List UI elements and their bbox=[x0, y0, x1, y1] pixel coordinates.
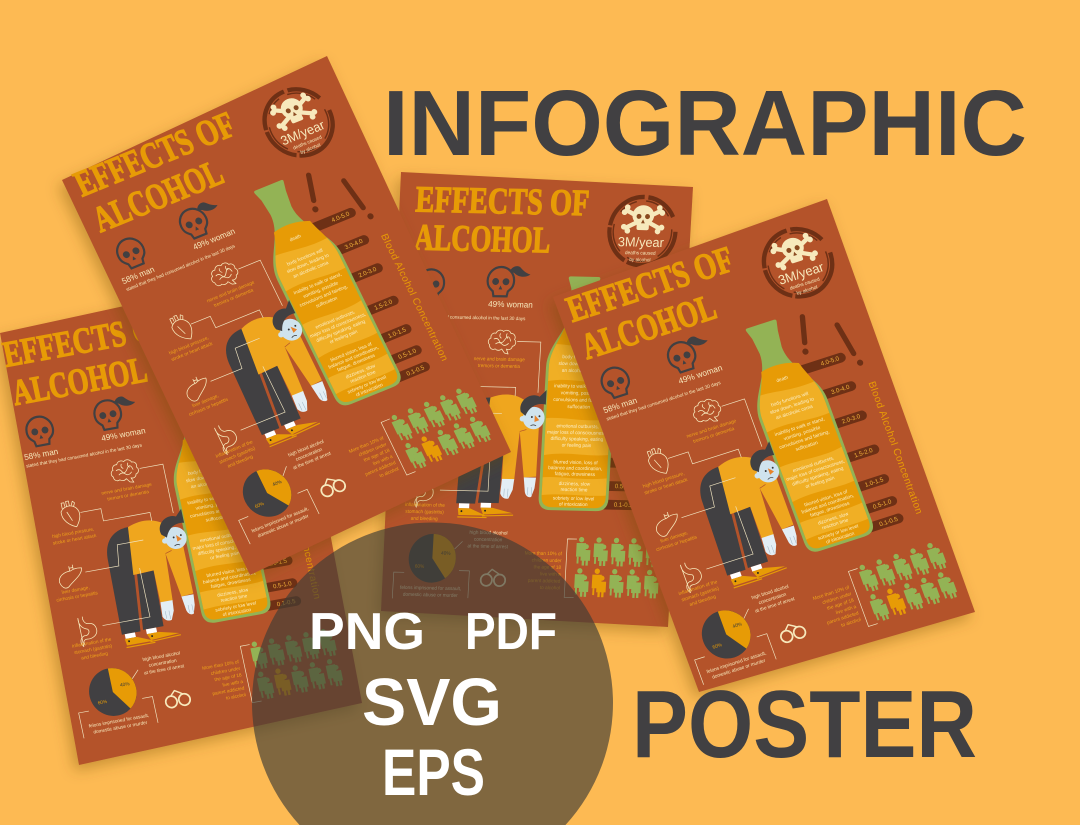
organ effects text: nerve and brain damage bbox=[101, 482, 153, 497]
format: PDF: PDF bbox=[465, 603, 557, 661]
bottle chart: 0.1-0.5 bbox=[614, 502, 633, 509]
poster title bbox=[0, 305, 182, 413]
translucent format circle bbox=[252, 522, 613, 825]
bottle chart: or feeling pain bbox=[210, 550, 240, 561]
bottle chart: reaction time bbox=[349, 369, 377, 385]
pie chart: 60% bbox=[415, 564, 425, 570]
bottle chart: difficulty speaking, eating bbox=[550, 436, 604, 443]
pie chart bbox=[695, 604, 757, 665]
organ effects text: inflammation of the bbox=[678, 579, 719, 597]
badge: 3M/year bbox=[776, 259, 826, 288]
organ effects text: nerve and brain damage bbox=[474, 356, 525, 363]
organ effects text: stroke or heart attack bbox=[644, 477, 689, 496]
bottle chart: 1.5-2.0 bbox=[373, 298, 394, 312]
bottle chart: blurred vision, loss of bbox=[553, 459, 599, 466]
bottle chart: vomiting, possible bbox=[195, 499, 234, 512]
bottle chart: 3.0-4.0 bbox=[247, 463, 268, 473]
bottle chart: 3.0-4.0 bbox=[344, 238, 365, 251]
pie chart: 60% bbox=[97, 699, 109, 706]
pie chart bbox=[407, 533, 457, 583]
bottle chart: slow down, leading to bbox=[185, 470, 231, 484]
pie chart bbox=[85, 664, 141, 720]
organ effects text: stroke or heart attack bbox=[52, 533, 98, 547]
children text: children under bbox=[210, 666, 241, 677]
children text: children under bbox=[531, 557, 562, 564]
skull statistics bbox=[589, 331, 728, 423]
organ effects text: tremors or dementia bbox=[213, 287, 255, 309]
arrest text: domestic abuse or murder bbox=[257, 513, 310, 539]
poster content bbox=[392, 178, 681, 604]
bottle chart: 0.1-0.5 bbox=[276, 598, 297, 608]
organ effects text: high blood pressure, bbox=[52, 526, 95, 540]
bottle chart: 3.0-4.0 bbox=[622, 361, 641, 369]
bottle chart: 1.5-2.0 bbox=[618, 429, 637, 436]
bottle chart: inability to walk or stand, bbox=[774, 416, 826, 438]
organ effects text: inflammation of the bbox=[405, 502, 445, 509]
bottle chart: an alcoholic coma bbox=[292, 260, 330, 280]
arrest text: felons imprisoned for assault, bbox=[400, 585, 461, 592]
bottle chart: blurred vision, loss of bbox=[803, 489, 849, 508]
bottle chart: balance and coordination, bbox=[328, 345, 380, 371]
bottle chart: 1.0-1.5 bbox=[616, 460, 636, 467]
bottle chart: death bbox=[577, 333, 589, 339]
organ effects text: liver damage, bbox=[61, 585, 90, 596]
arrest text: high blood alcohol bbox=[469, 530, 508, 537]
poster title: EFFECTS OF bbox=[415, 178, 590, 223]
bottle chart bbox=[149, 378, 317, 626]
organ effects text: high blood pressure, bbox=[642, 471, 685, 490]
organ effects text: and bleeding bbox=[81, 651, 109, 662]
bottle chart: reaction time bbox=[560, 487, 588, 494]
skull statistics bbox=[103, 196, 242, 292]
bottle chart: 4.0-5.0 bbox=[330, 210, 351, 224]
children text: live with a bbox=[372, 454, 394, 467]
bottle chart: major loss of consciousness, bbox=[192, 535, 253, 552]
poster: front right bbox=[553, 199, 975, 692]
bottle chart: slow down, leading to bbox=[286, 252, 330, 275]
bottle chart: 2.0-3.0 bbox=[254, 493, 274, 503]
bottle chart: 3.0-4.0 bbox=[830, 384, 851, 396]
bottle chart: convulsions and fainting, bbox=[778, 429, 831, 451]
bottle chart: 4.0-5.0 bbox=[241, 433, 262, 444]
children icons bbox=[574, 537, 661, 598]
person with callouts bbox=[611, 374, 879, 685]
children text: to alcohol bbox=[840, 617, 862, 629]
bottle chart: major loss of consciousness, bbox=[309, 312, 367, 340]
bottle chart: death bbox=[776, 375, 789, 384]
arrest text: high blood alcohol bbox=[287, 439, 325, 459]
bottle chart: difficulty speaking, eating bbox=[315, 319, 367, 344]
vertical axis label: Blood Alcohol Concentration bbox=[648, 367, 667, 508]
badge bbox=[253, 79, 344, 166]
badge bbox=[608, 196, 677, 266]
bottle chart: 0.1-0.5 bbox=[878, 516, 900, 528]
bottle chart: body functions will bbox=[187, 464, 226, 477]
bottle chart bbox=[231, 155, 446, 411]
pie chart: 40% bbox=[732, 621, 744, 630]
children text: live with a bbox=[222, 679, 244, 689]
bottle chart: of intoxication bbox=[355, 382, 385, 398]
bottle chart: convulsions and fainting, bbox=[553, 397, 605, 404]
bottle chart: 1.5-2.0 bbox=[853, 447, 874, 460]
organ effects text: inflammation of the bbox=[72, 637, 112, 650]
organ effects text: cirrhosis or hepatitis bbox=[188, 397, 230, 418]
bottle chart: vomiting, possible bbox=[783, 425, 822, 442]
bottle chart: slow down, leading to bbox=[558, 361, 604, 368]
arrest text bbox=[399, 528, 510, 600]
arrest text: high blood alcohol bbox=[142, 650, 181, 663]
organ effects text: and bleeding bbox=[227, 454, 254, 470]
bottle chart: fatigue, drowsiness bbox=[336, 352, 377, 373]
organ effects text bbox=[145, 280, 327, 474]
bottle chart: 0.5-1.0 bbox=[272, 580, 293, 590]
pie chart: 40% bbox=[120, 681, 131, 689]
poster title: EFFECTS OF bbox=[68, 104, 242, 204]
arrest text: at the time of arrest bbox=[144, 663, 185, 677]
arrest text: domestic abuse or murder bbox=[711, 658, 767, 681]
poster content bbox=[67, 68, 495, 544]
pie chart: 40% bbox=[441, 551, 451, 557]
children text: to alcohol bbox=[540, 585, 560, 591]
children text: More than 10% of bbox=[812, 585, 851, 602]
bottle chart: sobriety or low level bbox=[347, 374, 387, 395]
badge: 3M/year bbox=[278, 117, 328, 148]
poster content bbox=[0, 288, 345, 738]
arrest text bbox=[226, 438, 355, 541]
organ effects text: cirrhosis or hepatitis bbox=[655, 534, 699, 553]
children text: parent addicted bbox=[528, 578, 561, 585]
arrest text bbox=[77, 650, 196, 736]
arrest text: at the time of arrest bbox=[754, 596, 796, 615]
children text: parent addicted bbox=[212, 685, 245, 697]
skull statistics: 58% man bbox=[602, 395, 639, 415]
bottle chart: 2.0-3.0 bbox=[357, 266, 378, 279]
bottle chart: balance and coordination, bbox=[202, 570, 257, 586]
bottle chart: inability to walk or stand, bbox=[293, 272, 343, 296]
organ effects text: tremors or dementia bbox=[107, 489, 150, 503]
person with callouts bbox=[29, 445, 263, 738]
bottle chart: emotional outbursts, bbox=[314, 309, 356, 331]
bottle chart: suffocation bbox=[795, 440, 819, 453]
bottle chart: 4.0-5.0 bbox=[623, 331, 643, 339]
poster sheet bbox=[62, 56, 511, 575]
bottle chart: difficulty speaking, eating bbox=[197, 542, 250, 557]
children text: children under bbox=[358, 441, 388, 458]
bottle chart: inability to walk or stand, bbox=[554, 383, 606, 390]
heading: poster: POSTER bbox=[632, 671, 977, 778]
skull statistics: 58% man bbox=[23, 447, 59, 462]
bottle chart: reaction time bbox=[220, 593, 248, 604]
poster title: ALCOHOL bbox=[575, 286, 721, 367]
organ effects text: stomach (gastritis) bbox=[74, 643, 113, 656]
organ effects text: tremors or dementia bbox=[478, 363, 520, 370]
arrest text: concentration bbox=[295, 447, 324, 463]
bottle chart: body functions will bbox=[562, 354, 601, 361]
children text: to alcohol bbox=[225, 692, 246, 702]
bottle chart: 1.0-1.5 bbox=[268, 558, 288, 568]
poster content bbox=[560, 208, 961, 685]
organ effects text: liver damage, bbox=[660, 530, 689, 545]
format: SVG: SVG bbox=[362, 665, 502, 740]
bottle chart: convulsions and fainting, bbox=[190, 504, 242, 520]
pie chart bbox=[235, 462, 300, 524]
bottle chart: slow down, leading to bbox=[769, 396, 815, 416]
bottle chart: 0.5-1.0 bbox=[397, 347, 418, 361]
skull statistics bbox=[15, 393, 149, 469]
skull statistics: 58% man bbox=[408, 303, 444, 313]
poster title: ALCOHOL bbox=[86, 152, 230, 240]
children text: parent addicted bbox=[826, 610, 860, 626]
organ effects text: high blood pressure, bbox=[168, 335, 210, 357]
poster sheet bbox=[553, 199, 975, 692]
bottle chart: fatigue, drowsiness bbox=[210, 577, 252, 590]
arrest text: concentration bbox=[474, 537, 503, 543]
bottle chart: fatigue, drowsiness bbox=[555, 471, 596, 478]
bottle chart: emotional outbursts, bbox=[200, 531, 243, 544]
badge: by alcohol bbox=[629, 257, 651, 264]
children icons bbox=[389, 385, 493, 471]
skull statistics: 49% woman bbox=[677, 362, 724, 386]
bottle chart: major loss of consciousness, bbox=[547, 429, 608, 437]
organ effects text: stomach (gastritis) bbox=[218, 446, 257, 466]
arrest text: domestic abuse or murder bbox=[403, 592, 458, 599]
skull statistics: 58% man bbox=[120, 265, 156, 286]
bottle chart: 0.5-1.0 bbox=[872, 498, 893, 511]
vertical axis label: Blood Alcohol Concentration bbox=[378, 232, 450, 363]
poster title: EFFECTS OF bbox=[0, 305, 174, 375]
organ effects text: tremors or dementia bbox=[692, 426, 736, 445]
format: EPS: EPS bbox=[382, 735, 485, 809]
badge bbox=[754, 220, 842, 305]
arrest text: concentration bbox=[148, 658, 178, 669]
bottle chart: suffocation bbox=[205, 514, 229, 524]
poster sheet bbox=[381, 172, 693, 627]
bottle chart: 2.0-3.0 bbox=[620, 392, 640, 400]
children text: the age of 18 bbox=[363, 448, 391, 464]
bottle chart: or feeling pain bbox=[562, 442, 592, 449]
bottle chart: sobriety or low level bbox=[817, 523, 859, 542]
arrest text: domestic abuse or murder bbox=[93, 720, 148, 736]
organ effects text bbox=[36, 482, 186, 664]
skull statistics: 49% woman bbox=[100, 426, 147, 443]
bottle chart: or feeling pain bbox=[329, 329, 359, 345]
bottle chart: reaction time bbox=[821, 517, 850, 531]
skull statistics: stated that they had consumed alcohol in the last 30 days bbox=[125, 243, 236, 292]
bottle chart: death bbox=[289, 233, 303, 243]
bottle chart: inability to walk or stand, bbox=[187, 491, 239, 507]
badge: by alcohol bbox=[299, 142, 322, 156]
skull statistics: stated that they had consumed alcohol in the last 30 days bbox=[408, 314, 526, 321]
children icons bbox=[249, 627, 344, 700]
arrest text: felons imprisoned for assault, bbox=[251, 506, 310, 534]
organ effects text: and bleeding bbox=[689, 594, 717, 608]
children text: More than 10% of bbox=[348, 435, 386, 455]
children text: the age of 18 bbox=[214, 672, 243, 683]
format: PNG: PNG bbox=[309, 603, 425, 661]
bottle chart: an alcoholic coma bbox=[562, 368, 600, 375]
bottle chart bbox=[531, 276, 666, 512]
vertical axis label: Blood Alcohol Concentration bbox=[283, 463, 322, 600]
organ effects text bbox=[622, 418, 793, 612]
bottle chart: 1.0-1.5 bbox=[387, 326, 408, 340]
bottle chart: body functions will bbox=[286, 248, 324, 268]
arrest text: felons imprisoned for assault, bbox=[706, 650, 767, 675]
skull statistics bbox=[408, 264, 535, 321]
arrest text: felons imprisoned for assault, bbox=[88, 713, 150, 730]
heading: infographic: INFOGRAPHIC bbox=[383, 71, 1027, 175]
pie chart: 60% bbox=[712, 642, 724, 651]
children text: parent addicted bbox=[364, 460, 397, 478]
bottle chart: 4.0-5.0 bbox=[820, 355, 841, 368]
person with callouts bbox=[392, 328, 589, 602]
organ effects text: inflammation of the bbox=[215, 439, 254, 460]
poster title: ALCOHOL bbox=[413, 216, 552, 261]
pie chart: 60% bbox=[254, 501, 266, 510]
organ effects text: cirrhosis or hepatitis bbox=[56, 590, 99, 604]
bottle chart: sobriety or low level bbox=[553, 495, 594, 502]
bottle chart: 2.0-3.0 bbox=[841, 413, 862, 426]
bottle chart: body functions will bbox=[770, 391, 809, 408]
bottle chart: emotional outbursts, bbox=[792, 455, 835, 474]
skull statistics: 49% woman bbox=[488, 300, 533, 310]
children text: to alcohol bbox=[379, 466, 400, 479]
organ effects text bbox=[404, 355, 525, 524]
bottle chart: dizziness, slow bbox=[345, 363, 377, 380]
arrest text bbox=[686, 583, 813, 682]
bottle chart: vomiting, possible bbox=[561, 390, 599, 397]
bottle chart: vomiting, possible bbox=[302, 280, 340, 300]
badge: deaths caused bbox=[625, 250, 656, 257]
children text: live with a bbox=[540, 571, 561, 578]
arrest text: at the time of arrest bbox=[467, 543, 509, 550]
bottle chart: emotional outbursts, bbox=[556, 423, 599, 430]
organ effects text: stroke or heart attack bbox=[170, 341, 214, 363]
file formats text bbox=[309, 603, 557, 809]
arrest text: at the time of arrest bbox=[292, 450, 333, 471]
bottle chart: blurred vision, loss of bbox=[329, 341, 374, 364]
skull statistics: stated that they had consumed alcohol in the last 30 days bbox=[606, 380, 722, 423]
organ effects text: stomach (gastritis) bbox=[681, 586, 720, 603]
arrest text: concentration bbox=[758, 592, 788, 606]
pie chart: 40% bbox=[271, 479, 284, 488]
bottle chart: or feeling pain bbox=[805, 475, 836, 490]
poster title bbox=[412, 178, 590, 261]
bottle chart: death bbox=[196, 446, 209, 454]
children text: More than 10% of bbox=[525, 550, 563, 557]
bottle chart: balance and coordination, bbox=[801, 493, 855, 515]
bottle chart: of intoxication bbox=[222, 607, 252, 618]
badge: 3M/year bbox=[617, 234, 665, 250]
children text: the age of 18 bbox=[533, 564, 562, 571]
bottle chart: of intoxication bbox=[825, 531, 856, 545]
poster sheet bbox=[0, 272, 362, 765]
organ effects text: and bleeding bbox=[410, 516, 438, 522]
bottle chart: sobriety or low level bbox=[215, 600, 257, 614]
bottle chart: balance and coordination, bbox=[548, 465, 602, 472]
skull statistics: 49% woman bbox=[192, 227, 237, 252]
poster title: EFFECTS OF bbox=[561, 238, 739, 330]
poster: upper left bbox=[62, 56, 511, 575]
bottle chart: dizziness, slow bbox=[217, 587, 249, 599]
bottle chart bbox=[722, 298, 920, 557]
vertical axis label: Blood Alcohol Concentration bbox=[866, 380, 924, 516]
organ effects text: liver damage, bbox=[191, 393, 220, 409]
bottle chart: dizziness, slow bbox=[817, 511, 850, 527]
bottle chart: major loss of consciousness, bbox=[786, 459, 846, 483]
bottle chart: difficulty speaking, eating bbox=[791, 466, 845, 488]
bottle chart: suffocation bbox=[567, 404, 591, 411]
organ effects text: stomach (gastritis) bbox=[405, 509, 444, 516]
bottle chart: dizziness, slow bbox=[558, 481, 591, 488]
children text: children under bbox=[822, 591, 853, 606]
bottle chart: 0.1-0.5 bbox=[405, 364, 426, 378]
children text: More than 10% of bbox=[202, 659, 240, 672]
poster title: ALCOHOL bbox=[8, 349, 151, 413]
arrest text: high blood alcohol bbox=[751, 584, 790, 601]
bottle chart: an alcoholic coma bbox=[775, 404, 814, 421]
bottle chart: 1.5-2.0 bbox=[261, 527, 282, 538]
badge: by alcohol bbox=[796, 284, 818, 297]
children icons bbox=[857, 540, 959, 623]
skull statistics: stated that they had consumed alcohol in the last 30 days bbox=[26, 442, 143, 469]
bottle chart: 0.5-1.0 bbox=[615, 483, 634, 491]
poster: back left bbox=[0, 272, 362, 765]
bottle chart: convulsions and fainting, bbox=[299, 284, 349, 309]
bottle chart: of intoxication bbox=[559, 501, 588, 508]
badge: deaths caused bbox=[789, 276, 821, 292]
children text: live with a bbox=[835, 604, 858, 616]
poster: back centre bbox=[381, 172, 693, 627]
person with callouts bbox=[132, 233, 418, 544]
poster title bbox=[68, 104, 259, 240]
bottle chart: an alcoholic coma bbox=[190, 477, 229, 490]
bottle chart: suffocation bbox=[315, 295, 339, 309]
children text: the age of 18 bbox=[826, 597, 855, 612]
bottle chart: fatigue, drowsiness bbox=[809, 500, 851, 519]
organ effects text: nerve and brain damage bbox=[686, 418, 738, 440]
badge: deaths caused bbox=[292, 134, 323, 151]
bottle chart: blurred vision, loss of bbox=[206, 565, 251, 579]
bottle chart: 1.0-1.5 bbox=[864, 476, 885, 489]
organ effects text: nerve and brain damage bbox=[206, 280, 256, 304]
poster title bbox=[561, 238, 753, 367]
